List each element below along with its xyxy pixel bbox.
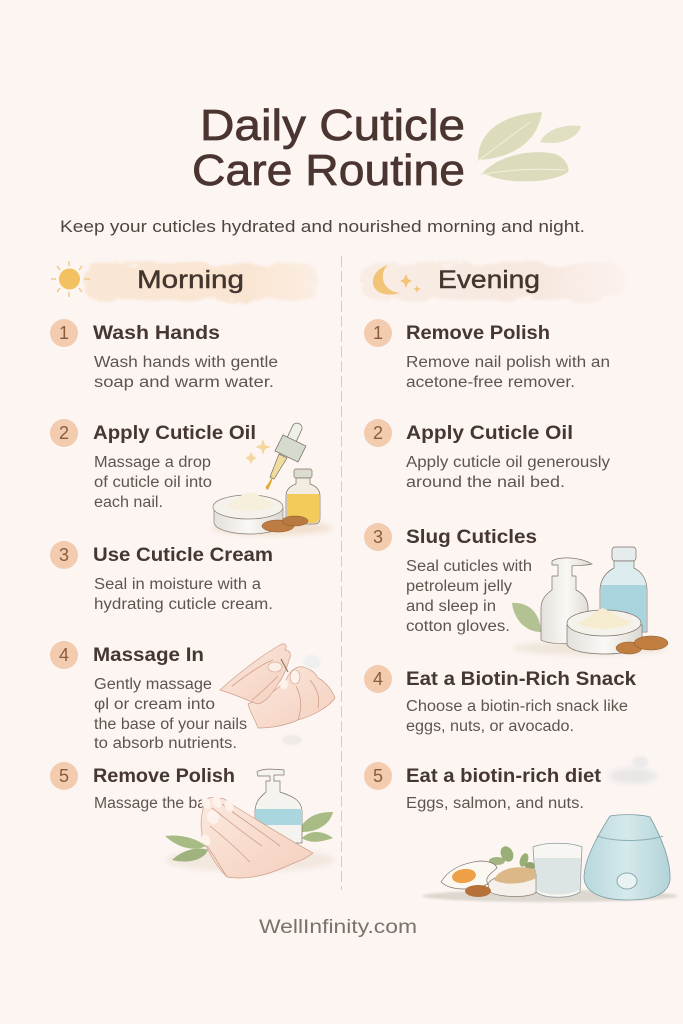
number badge: 3 <box>59 545 69 565</box>
steam <box>609 768 657 784</box>
water bottle <box>600 547 647 632</box>
almonds <box>616 642 642 654</box>
cream jar <box>567 608 642 654</box>
number badge: 4 <box>59 645 69 665</box>
table shadow <box>422 890 678 902</box>
step heading: Eat a biotin-rich diet <box>406 765 602 787</box>
number badge: 4 <box>373 669 383 689</box>
step text: φl or cream into <box>94 696 215 713</box>
number badge <box>50 762 78 790</box>
morning brush stroke <box>84 264 318 300</box>
hand <box>201 798 313 878</box>
panel: evening <box>362 264 624 300</box>
step heading: Massage In <box>93 644 204 666</box>
step text <box>406 698 628 735</box>
title <box>192 101 465 195</box>
fried egg <box>441 861 497 889</box>
step: morning 5 <box>50 762 235 812</box>
step: morning 2 <box>50 419 256 511</box>
step heading: Wash Hands <box>93 322 220 344</box>
nut bowl <box>488 867 536 896</box>
pump bottle <box>255 769 302 843</box>
step text: acetone-free remover. <box>406 374 575 391</box>
step text: cotton gloves. <box>406 618 510 635</box>
step text: Remove nail polish with an <box>406 354 610 371</box>
pump bottle <box>541 558 592 644</box>
step text <box>406 558 532 635</box>
step: evening 1 <box>364 319 610 391</box>
step text: and sleep in <box>406 598 496 615</box>
almonds <box>262 520 294 532</box>
title: Care Routine <box>192 146 465 195</box>
sparkles <box>255 439 271 455</box>
step text: Eggs, salmon, and nuts. <box>406 795 584 812</box>
finger lines <box>232 660 319 720</box>
step text: of cuticle oil into <box>94 474 212 491</box>
number badge: 1 <box>373 323 383 343</box>
step text: hydrating cuticle cream. <box>94 596 273 613</box>
number badge <box>50 419 78 447</box>
number badge: 3 <box>373 527 383 547</box>
almond <box>465 885 491 897</box>
illustration: pump bottle, water bottle, cream jar and almonds <box>512 547 668 655</box>
nails and tool <box>268 662 282 672</box>
herbs <box>489 844 535 870</box>
step text: Gently massage <box>94 676 212 693</box>
step text: each nail. <box>94 494 163 511</box>
illustration: egg, nuts, water glass and humidifier <box>422 756 678 902</box>
icon: leaves <box>475 112 581 181</box>
number badge <box>364 762 392 790</box>
step: morning 3 <box>50 541 273 613</box>
footer: website: WellInfinity.com <box>259 917 417 938</box>
number badge <box>364 665 392 693</box>
number badge: 5 <box>373 766 383 786</box>
step: morning 4 <box>50 641 247 752</box>
step text: to absorb nutrients. <box>94 735 237 752</box>
oil bottle <box>286 469 320 524</box>
leaf <box>512 603 541 632</box>
number badge <box>50 641 78 669</box>
step heading: Use Cuticle Cream <box>93 544 273 566</box>
step heading: Remove Polish <box>93 765 235 787</box>
step text: Wash hands with gentle <box>94 354 278 371</box>
step: evening 5 <box>364 762 602 812</box>
step text <box>94 576 273 613</box>
icon: moon <box>373 265 421 295</box>
step heading: Slug Cuticles <box>406 526 537 548</box>
number badge: 2 <box>59 423 69 443</box>
step text <box>94 354 278 391</box>
number badge: 5 <box>59 766 69 786</box>
step text <box>94 454 212 511</box>
step heading: Apply Cuticle Oil <box>93 422 256 444</box>
leaves <box>165 812 333 862</box>
cream jar <box>213 492 283 534</box>
icon: sun <box>51 261 90 297</box>
right hand <box>248 667 335 728</box>
step text: the base of your nails <box>94 716 247 733</box>
illustration: hand, bottle and leaves <box>165 769 335 878</box>
glass <box>533 843 582 897</box>
divider <box>340 256 342 890</box>
number badge <box>364 419 392 447</box>
finger lines and nails <box>200 795 280 877</box>
step text: Seal cuticles with <box>406 558 532 575</box>
panel: morning <box>51 261 318 300</box>
step: evening 3 <box>364 523 537 635</box>
humidifier <box>584 815 670 900</box>
number badge <box>364 319 392 347</box>
step heading: Apply Cuticle Oil <box>406 422 573 444</box>
left hand <box>220 644 290 704</box>
step: morning 1 <box>50 319 278 391</box>
step text <box>406 354 610 391</box>
step text: Massage the ba <box>94 795 206 812</box>
step text <box>406 454 610 491</box>
number badge: 2 <box>373 423 383 443</box>
evening heading: Evening <box>438 266 540 294</box>
step text: petroleum jelly <box>406 578 512 595</box>
step: evening 2 <box>364 419 610 491</box>
step text: Choose a biotin-rich snack like <box>406 698 628 715</box>
step heading: Remove Polish <box>406 322 550 344</box>
step text <box>94 676 247 752</box>
step heading: Eat a Biotin-Rich Snack <box>406 668 636 690</box>
step text: Apply cuticle oil generously <box>406 454 610 471</box>
step text: around the nail bed. <box>406 474 565 491</box>
illustration: massaging hands <box>220 644 335 745</box>
step text: soap and warm water. <box>94 374 274 391</box>
number badge <box>364 523 392 551</box>
subtitle: Keep your cuticles hydrated and nourished morning and night. <box>60 217 585 236</box>
number badge: 1 <box>59 323 69 343</box>
title: Daily Cuticle <box>200 101 465 150</box>
number badge <box>50 541 78 569</box>
number badge <box>50 319 78 347</box>
illustration: cuticle oil, cream jar and almonds <box>212 423 332 535</box>
step text: Massage a drop <box>94 454 211 471</box>
step text: eggs, nuts, or avocado. <box>406 718 574 735</box>
morning heading: Morning <box>137 266 244 294</box>
step text: Seal in moisture with a <box>94 576 261 593</box>
evening brush stroke <box>362 264 624 300</box>
step: evening 4 <box>364 665 636 735</box>
dropper <box>266 423 306 490</box>
